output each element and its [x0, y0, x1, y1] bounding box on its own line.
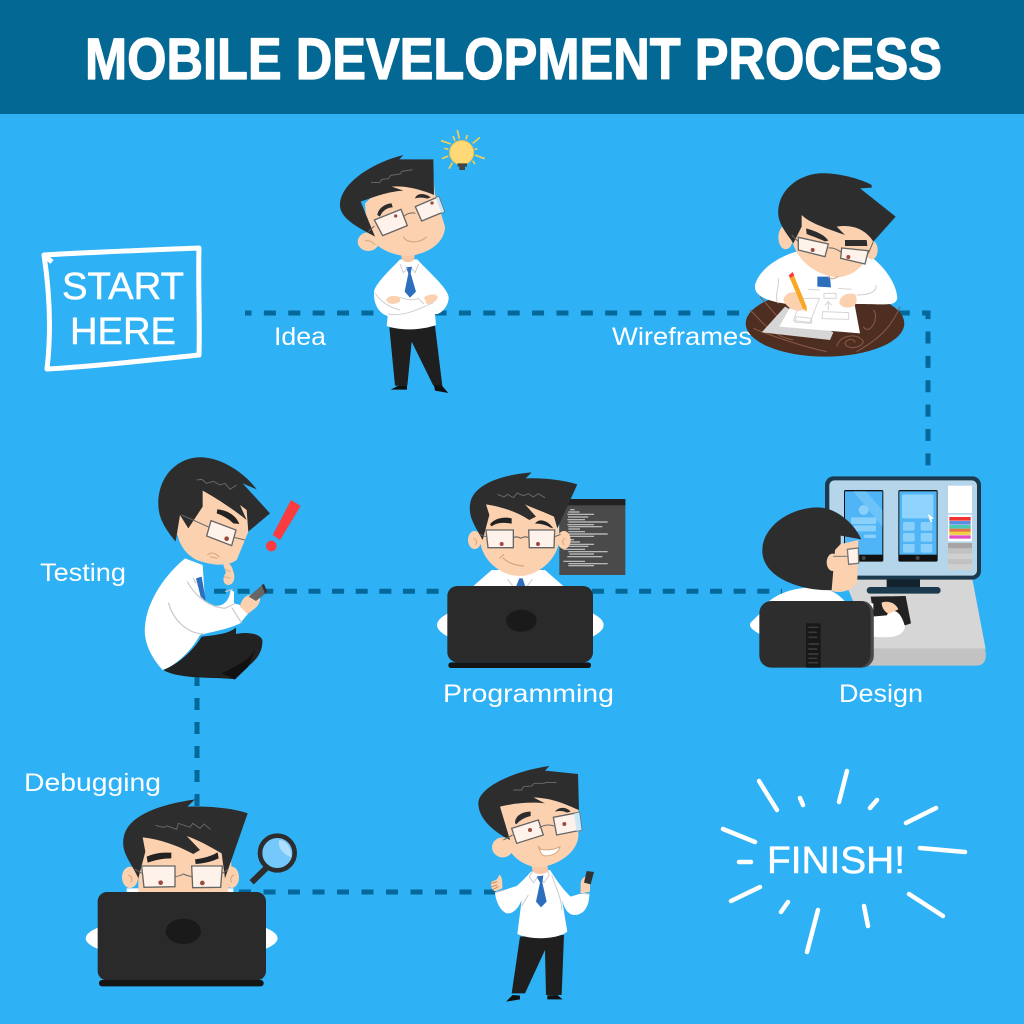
start here sign: HERE — [70, 311, 176, 353]
laptop — [98, 892, 266, 986]
finish text: FINISH! — [767, 840, 905, 882]
monitor — [825, 476, 981, 594]
icon: red exclamation mark — [266, 500, 301, 551]
dashed connector: design to programming to testing — [214, 589, 782, 594]
icon: magnifying glass — [252, 836, 295, 882]
label: Debugging: Debugging — [24, 769, 161, 797]
label: Idea: Idea — [274, 323, 326, 351]
label: Programming: Programming — [443, 680, 614, 708]
label: Design: Design — [839, 680, 923, 708]
figure: testing, man sitting with phone — [145, 457, 301, 679]
office chair — [759, 601, 874, 668]
start here sign — [44, 248, 199, 369]
figure: wireframes, man drawing at table — [746, 173, 904, 357]
figure: programming, man at laptop with code screen — [437, 472, 625, 668]
desk — [840, 570, 986, 649]
icon: lightbulb — [441, 130, 485, 170]
laptop — [447, 586, 593, 668]
start here sign: START — [62, 266, 184, 308]
figure: design, man at desktop monitor — [750, 476, 986, 668]
finish burst — [723, 771, 965, 952]
dashed connector: testing to debugging — [194, 676, 200, 806]
code screen — [559, 499, 625, 575]
dashed connector: idea to wireframes to design — [245, 313, 928, 480]
label: Wireframes: Wireframes — [612, 323, 752, 351]
label: Testing: Testing — [40, 559, 126, 587]
figure: debugging, man at laptop with magnifier — [86, 799, 295, 986]
header band — [0, 0, 1024, 114]
dashed connector: debugging to finish figure — [239, 890, 520, 894]
figure: finished, man with thumbs up and phone — [478, 766, 594, 1002]
burst rays — [723, 771, 965, 952]
figure: idea, man with crossed arms — [340, 130, 485, 393]
